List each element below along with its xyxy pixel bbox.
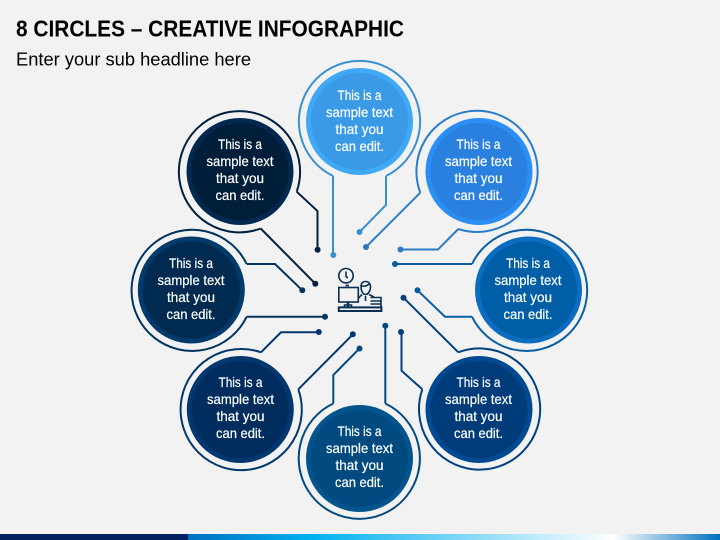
circle 6: lower left: can edit. <box>216 426 265 441</box>
circle 7: left: that you <box>167 290 215 305</box>
circle 4: lower right: This is a <box>456 375 501 390</box>
circle 1: top <box>299 61 420 258</box>
circle 4: lower right: sample text <box>445 392 512 407</box>
circle 2: upper right <box>363 111 538 253</box>
circle 6: lower left: that you <box>216 409 264 424</box>
circle 2: upper right: that you <box>454 171 502 186</box>
circle 3: right <box>392 230 587 351</box>
circle 8: upper left: This is a <box>218 137 262 152</box>
circle 7: left: can edit. <box>166 307 216 322</box>
footer bar <box>0 534 720 540</box>
circle 3: right: This is a <box>506 256 550 271</box>
circle 5: bottom: that you <box>336 458 384 473</box>
circle 7: left: sample text <box>158 273 225 288</box>
circle 1: top: can edit. <box>335 139 384 154</box>
circle 6: lower left <box>181 329 356 470</box>
circle 2: upper right: sample text <box>445 154 512 169</box>
circle 1: top: sample text <box>326 105 393 120</box>
circle 1: top: This is a <box>338 88 382 103</box>
circle 4: lower right: can edit. <box>454 426 503 441</box>
circle 3: right: that you <box>504 290 552 305</box>
circle 5: bottom: sample text <box>326 441 393 456</box>
circle 8: upper left: can edit. <box>216 188 264 203</box>
circle 7: left <box>132 230 328 351</box>
circle 8: upper left: sample text <box>206 154 274 169</box>
circle 4: lower right: that you <box>454 409 502 424</box>
circle 8: upper left <box>179 111 321 287</box>
circle 4: lower right <box>398 295 540 470</box>
subtitle: Enter your sub headline here <box>16 50 251 70</box>
circle 2: upper right: This is a <box>456 137 501 152</box>
circle 5: bottom: can edit. <box>335 475 384 490</box>
circle 3: right: can edit. <box>504 307 552 322</box>
circle 1: top: that you <box>336 122 384 137</box>
circle 6: lower left: sample text <box>207 392 274 407</box>
circle 3: right: sample text <box>494 273 562 288</box>
circle 8: upper left: that you <box>216 171 264 186</box>
circle 2: upper right: can edit. <box>454 188 503 203</box>
icon: person at desk with clock <box>339 268 381 311</box>
circle 7: left: This is a <box>169 256 213 271</box>
circle 5: bottom <box>299 323 420 519</box>
circle 6: lower left: This is a <box>218 375 263 390</box>
circle 5: bottom: This is a <box>338 424 382 439</box>
title: 8 CIRCLES – CREATIVE INFOGRAPHIC <box>16 16 404 42</box>
